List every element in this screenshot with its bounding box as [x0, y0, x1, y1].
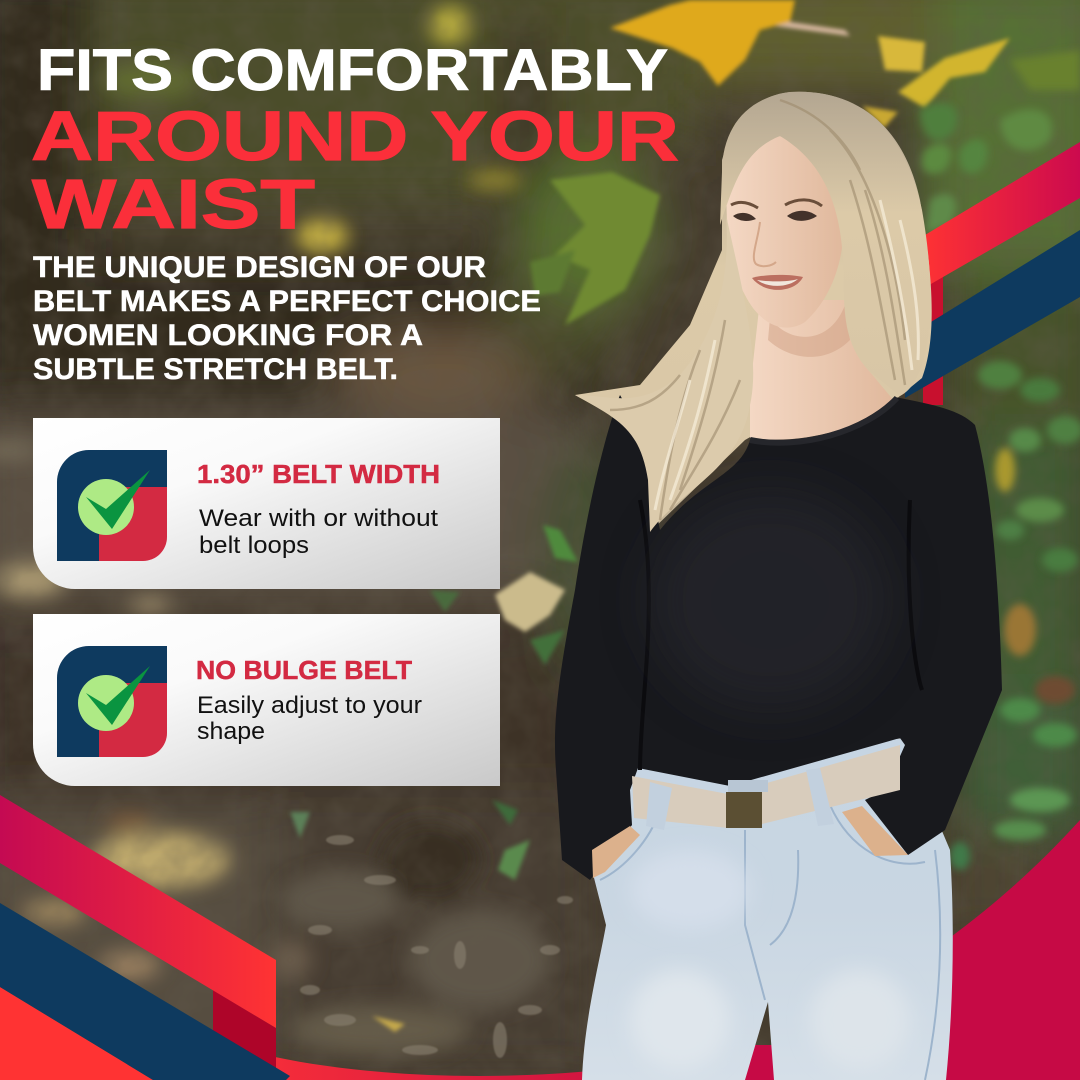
ribbon fold: dark red [213, 990, 276, 1070]
card body: belt loops [199, 532, 309, 559]
icon: check mark badge [57, 646, 167, 757]
icon: check mark badge [57, 450, 167, 561]
title line: AROUND YOUR: AROUND YOUR [31, 97, 679, 175]
yellow maple leaves [610, 0, 795, 86]
right decorative ribbons [905, 142, 1080, 405]
ribbon: navy [0, 903, 290, 1080]
panel: no bulge belt [33, 614, 500, 786]
nose and mouth [754, 222, 776, 266]
card body [197, 692, 422, 745]
card body: Wear with or without [199, 505, 438, 532]
belt buckle [726, 792, 762, 828]
green leaves [550, 172, 660, 325]
description text: BELT MAKES A PERFECT CHOICE [33, 285, 541, 318]
card heading: NO BULGE BELT [196, 655, 412, 685]
card body: shape [197, 718, 265, 745]
neck and chest [750, 300, 895, 440]
hair behind shoulders [575, 92, 932, 532]
ribbon: red [920, 142, 1080, 288]
card body [199, 505, 438, 559]
face [726, 136, 844, 328]
title [31, 38, 679, 243]
front hair strands [575, 215, 753, 532]
woman wearing belt [555, 92, 1002, 1080]
description text [33, 251, 541, 386]
description text: THE UNIQUE DESIGN OF OUR [33, 251, 486, 284]
card body: Easily adjust to your [197, 692, 422, 719]
beige belt [632, 745, 900, 828]
belt loops [646, 768, 834, 830]
ribbon: navy [905, 230, 1080, 398]
card heading: 1.30” BELT WIDTH [197, 459, 440, 489]
panel: 1.30 inch belt width [33, 418, 500, 589]
bottom right and bottom curved red shape [275, 820, 1080, 1080]
jeans [582, 738, 953, 1080]
bottom left decorative ribbons [0, 795, 290, 1080]
ribbon: bottom corner red [0, 987, 153, 1080]
ribbon: red [0, 795, 276, 1028]
hands in pockets [592, 826, 640, 878]
description text: SUBTLE STRETCH BELT. [33, 353, 398, 386]
title line: FITS COMFORTABLY: FITS COMFORTABLY [37, 38, 668, 103]
description text: WOMEN LOOKING FOR A [33, 319, 423, 352]
title line: WAIST: WAIST [32, 165, 315, 243]
top of hair over face [720, 92, 931, 396]
ribbon fold: dark red [923, 270, 943, 405]
eyes and brows [731, 200, 822, 208]
black knit sweater [555, 395, 1002, 880]
